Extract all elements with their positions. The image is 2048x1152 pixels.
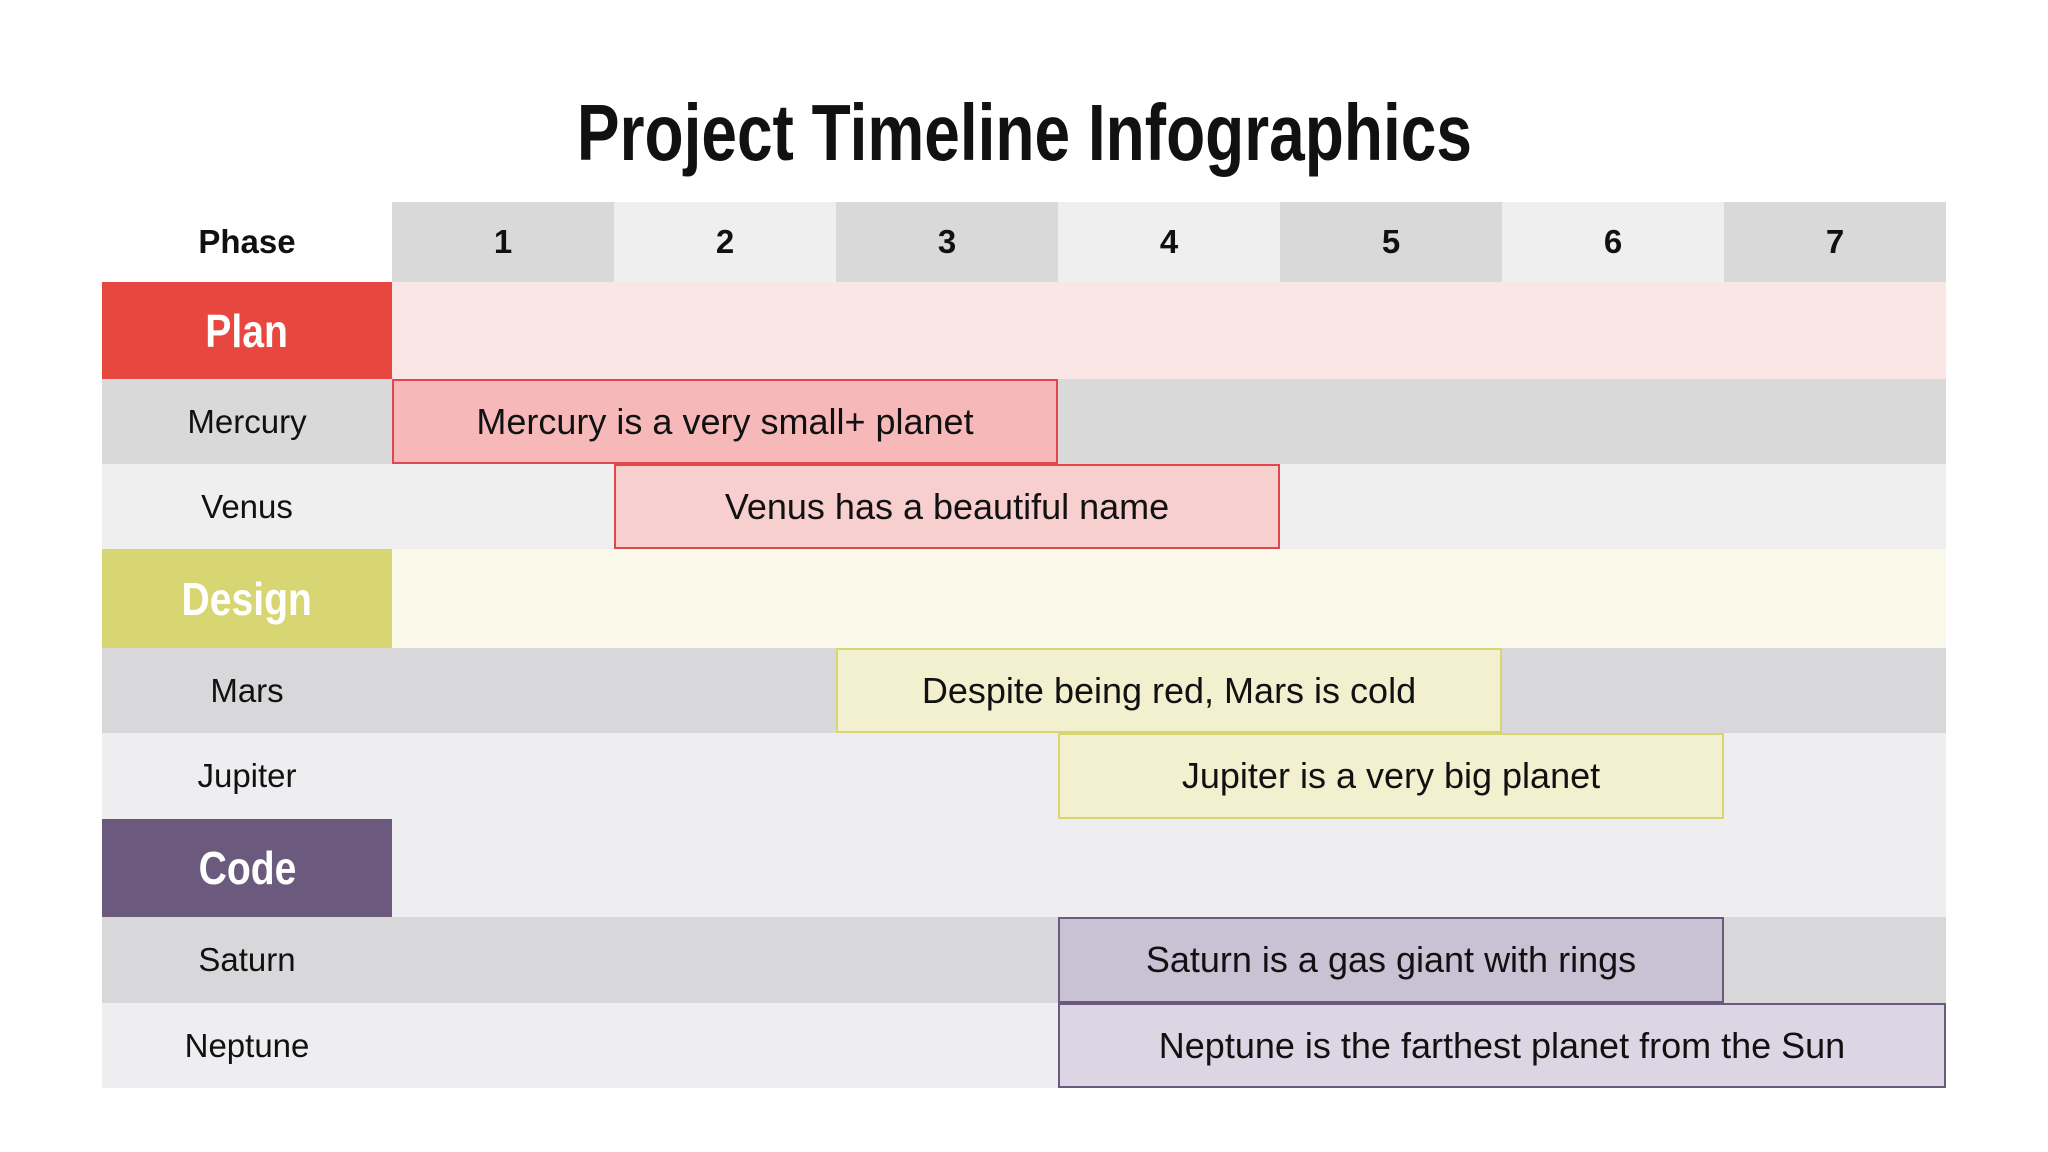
bar: Mercury: Mercury is a very small+ planet (476, 400, 974, 442)
row label: Mercury: Mercury (187, 402, 307, 440)
header row (198, 202, 1946, 282)
bar: Neptune (1058, 1003, 1946, 1088)
header row: 2 (716, 223, 734, 260)
bar: Venus: Venus has a beautiful name (725, 486, 1169, 526)
bar: Neptune: Neptune is the farthest planet from the Sun (1159, 1024, 1845, 1066)
header row: 1 (494, 223, 512, 260)
phase label: Plan (102, 282, 392, 379)
header row: Phase (198, 223, 296, 260)
bar: Saturn (1058, 917, 1724, 1003)
row label: Saturn: Saturn (198, 941, 296, 978)
row backgrounds (392, 282, 1946, 379)
bar: Jupiter (1058, 733, 1724, 819)
bar: Saturn: Saturn is a gas giant with rings (1146, 939, 1636, 980)
bar: Mars (836, 648, 1502, 733)
row label: Jupiter: Jupiter (197, 757, 297, 794)
header row: 4 (1160, 223, 1178, 260)
bar: Jupiter: Jupiter is a very big planet (1182, 755, 1600, 796)
phase label: Design (102, 549, 392, 648)
phase label: Code (102, 819, 392, 917)
header row: 3 (938, 223, 956, 260)
header row: 7 (1826, 223, 1844, 260)
phase label: Plan: Plan (206, 304, 288, 356)
bar: Venus (614, 464, 1280, 549)
phase label: Code: Code (198, 842, 296, 894)
row label: Mars: Mars (210, 672, 284, 708)
title: Project Timeline Infographics (576, 88, 1472, 177)
header row: 6 (1604, 223, 1622, 260)
header row: 5 (1382, 223, 1400, 260)
row label: Venus: Venus (201, 488, 293, 524)
phase label: Design: Design (182, 572, 312, 624)
bar: Mercury (392, 379, 1058, 464)
row label: Neptune: Neptune (185, 1026, 309, 1064)
bar: Mars: Despite being red, Mars is cold (922, 670, 1416, 710)
